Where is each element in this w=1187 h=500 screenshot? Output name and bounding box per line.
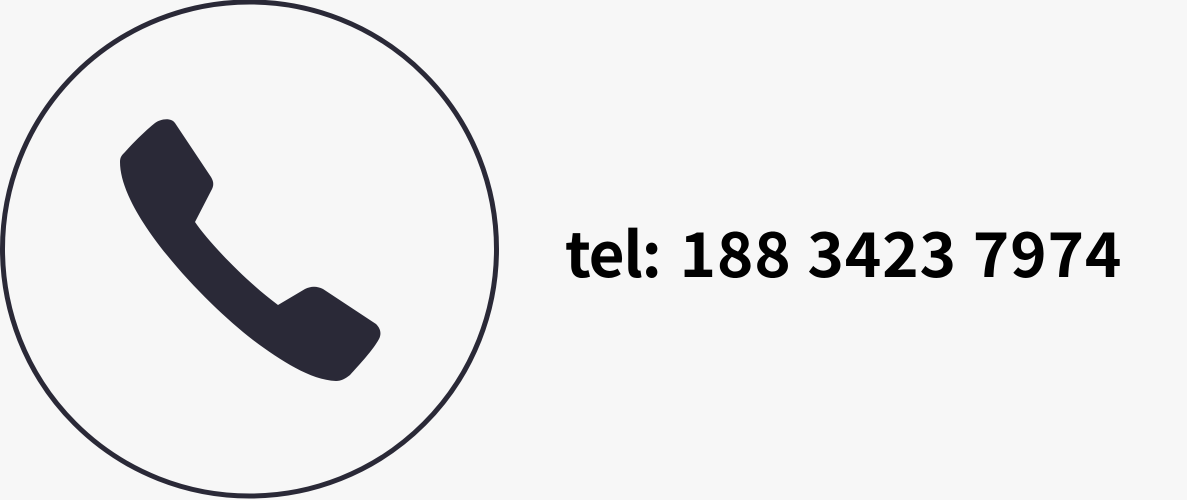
icon: phone in circle	[0, 0, 499, 498]
phone handset	[120, 119, 380, 381]
circle outline	[2, 2, 496, 496]
phone number text: 3423	[807, 205, 957, 295]
phone number text: 7974	[973, 205, 1122, 295]
phone number text	[565, 205, 1122, 295]
phone number text: tel:	[565, 205, 660, 295]
phone number text: 188	[680, 205, 792, 295]
